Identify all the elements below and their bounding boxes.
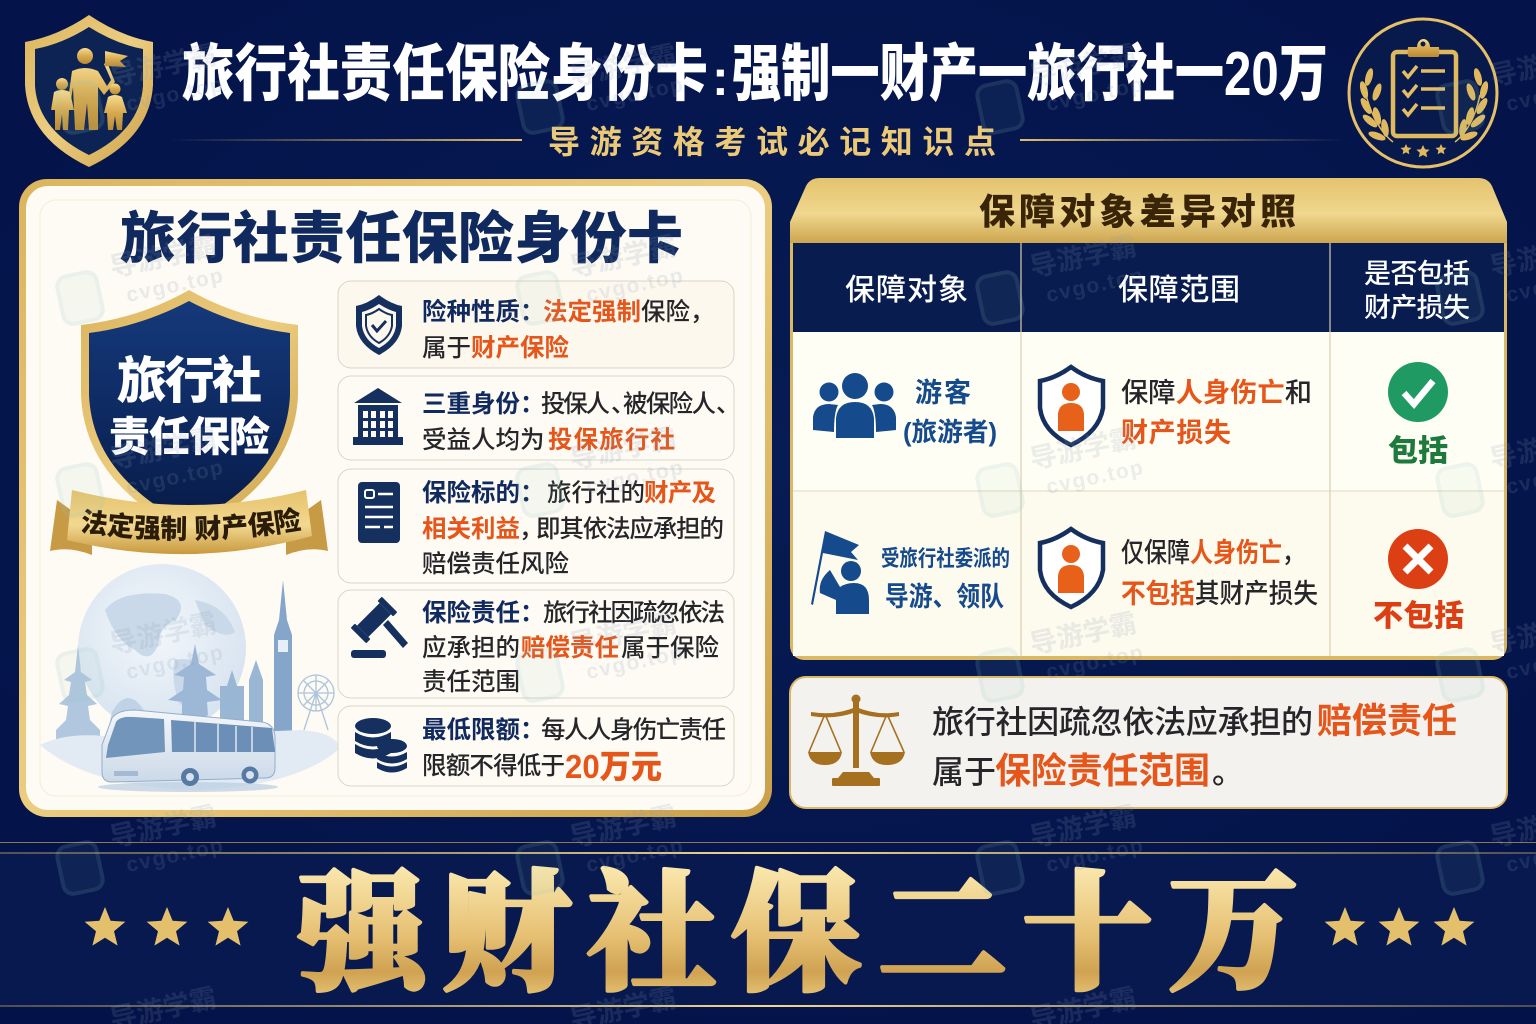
text: 保险责任： xyxy=(422,599,544,627)
stars right xyxy=(1325,907,1474,946)
icon: coins xyxy=(355,718,407,772)
icon: scales xyxy=(808,694,905,786)
icon: group of people xyxy=(813,373,896,438)
watermarks: cvgo.top xyxy=(584,834,686,877)
watermarks: cvgo.top xyxy=(124,264,226,307)
icon: gavel xyxy=(351,597,408,658)
watermarks: cvgo.top xyxy=(1044,641,1146,684)
table title bar xyxy=(790,178,1507,243)
watermarks: cvgo.top xyxy=(584,264,686,307)
row 4: liability xyxy=(338,590,734,698)
row: tourists: 财产损失 xyxy=(1121,418,1231,448)
row 4: liability: 责任范围 xyxy=(422,668,520,696)
row: guides: 导游、领队 xyxy=(885,582,1004,612)
label: 游客 xyxy=(915,378,971,408)
watermarks: cvgo.top xyxy=(124,456,226,499)
row 3: subject: 即其依法应承担的 xyxy=(536,515,724,543)
title xyxy=(182,40,1328,109)
emblem shield xyxy=(81,290,298,535)
icon: document xyxy=(358,482,400,543)
column heads xyxy=(793,243,1504,332)
watermarks: cvgo.top xyxy=(124,73,226,116)
row 1: nature xyxy=(338,281,734,368)
center pagoda xyxy=(168,644,222,735)
text: 险种性质： xyxy=(422,298,544,326)
watermarks: cvgo.top xyxy=(584,73,686,116)
ribbon: 法定强制 财产保险 xyxy=(82,507,302,542)
mnemonic band xyxy=(0,842,1536,1008)
row 5: minimum: 限额不得低于 xyxy=(422,752,565,780)
watermarks: 导游学霸 xyxy=(567,801,679,853)
watermarks: cvgo.top xyxy=(1044,73,1146,116)
watermarks: 导游学霸 xyxy=(107,231,219,283)
icon: shield check xyxy=(356,295,402,355)
row 4: liability: 属于保险 xyxy=(621,634,719,662)
column heads: 保障对象 xyxy=(845,274,968,307)
text: 旅行社因疏忽依法 xyxy=(543,599,725,627)
watermarks: cvgo.top xyxy=(584,641,686,684)
column heads: 财产损失 xyxy=(1364,293,1470,323)
watermarks: 导游学霸 xyxy=(567,423,679,475)
text: 每人人身伤亡责任 xyxy=(541,716,726,744)
bus xyxy=(98,710,278,792)
text: 保险， xyxy=(641,298,714,326)
column heads: 保障范围 xyxy=(1118,274,1240,307)
callout text: 赔偿责任 xyxy=(1317,702,1457,741)
text: 财产及 xyxy=(644,479,716,507)
watermarks: 导游学霸 xyxy=(107,40,219,92)
watermarks: 导游学霸 xyxy=(1027,231,1139,283)
watermarks: 导游学霸 xyxy=(1027,423,1139,475)
row: tourists: (旅游者) xyxy=(903,417,997,447)
icon: person shield xyxy=(1040,367,1103,445)
row 3: subject xyxy=(338,469,734,583)
text: 旅行社的 xyxy=(547,479,645,507)
row: tourists xyxy=(813,362,1448,468)
icon: clipboard medal xyxy=(1349,19,1497,167)
row 4: liability: 应承担的 xyxy=(422,634,520,662)
left pagoda xyxy=(56,645,100,745)
callout: key point xyxy=(790,677,1507,808)
callout text: 旅行社因疏忽依法应承担的 xyxy=(932,704,1313,740)
text: 保障人身伤亡和 xyxy=(1121,378,1312,408)
watermarks: cvgo.top xyxy=(584,456,686,499)
header xyxy=(25,15,1497,167)
callout: key point: 。 xyxy=(1212,754,1244,790)
row 2: identity: 受益人均为 xyxy=(422,426,544,454)
icon: check xyxy=(1388,362,1448,422)
watermarks: cvgo.top xyxy=(124,834,226,877)
icon: cross xyxy=(1388,529,1448,589)
text: 法定强制 xyxy=(543,298,641,326)
row: guides: 不包括其财产损失 xyxy=(1121,579,1318,609)
emblem shield: 责任保险 xyxy=(109,414,270,460)
watermarks: 导游学霸 xyxy=(107,608,219,660)
illustration: globe skyline and bus xyxy=(40,564,340,792)
icon: building xyxy=(353,388,403,445)
table title bar: 保障对象差异对照 xyxy=(979,191,1296,232)
ground haze xyxy=(40,730,340,790)
text: 保险标的： xyxy=(422,479,544,507)
label: included: 包括 xyxy=(1388,435,1448,468)
row 2: identity xyxy=(338,376,740,460)
watermarks: 导游学霸 xyxy=(1027,801,1139,853)
slogan: 强财社保二十万 xyxy=(296,864,1298,1008)
emblem text: 旅行社 xyxy=(117,353,262,409)
watermarks: 导游学霸 xyxy=(107,801,219,853)
watermarks: 导游学霸 xyxy=(567,40,679,92)
watermarks: cvgo.top xyxy=(1044,834,1146,877)
row 3: subject: 赔偿责任风险 xyxy=(422,550,569,578)
icon: guide with flag xyxy=(811,531,869,614)
ferris wheel xyxy=(298,675,334,730)
watermarks: 导游学霸 xyxy=(107,423,219,475)
label: excluded: 不包括 xyxy=(1373,600,1464,633)
title: 强制一财产一旅行社一20万 xyxy=(732,40,1328,109)
callout: key point: 保险责任范围 xyxy=(995,750,1210,791)
row 1: nature: 财产保险 xyxy=(471,334,569,362)
table body rows xyxy=(793,332,1504,491)
watermarks: cvgo.top xyxy=(1044,456,1146,499)
row 5: minimum xyxy=(338,706,734,786)
row 5: minimum: 20万元 xyxy=(565,748,662,785)
icon: person shield xyxy=(1040,529,1103,607)
card frame xyxy=(19,179,772,817)
text: 、 xyxy=(716,391,740,418)
table frame xyxy=(790,215,1507,660)
text: 被保险人 xyxy=(623,390,716,418)
subtitle rule left xyxy=(170,139,522,141)
panel: comparison table xyxy=(790,178,1507,660)
label: 受旅行社委派的 xyxy=(881,546,1010,571)
row 1: nature: 属于 xyxy=(422,335,471,362)
card heading: 旅行社责任保险身份卡 xyxy=(120,207,683,270)
watermarks: 导游学霸 xyxy=(1027,608,1139,660)
watermarks: 导游学霸 xyxy=(1027,40,1139,92)
text: 三重身份： xyxy=(422,390,544,418)
row 3: subject: 相关利益 xyxy=(422,515,520,543)
text: 仅保障人身伤亡， xyxy=(1121,538,1305,568)
ribbon xyxy=(50,490,328,555)
title: : xyxy=(712,50,729,106)
callout: key point: 属于 xyxy=(932,754,996,790)
row: guides xyxy=(811,529,1464,633)
icon: guide family shield xyxy=(25,15,153,167)
watermarks: cvgo.top xyxy=(124,641,226,684)
text: 投保人 xyxy=(541,390,610,418)
watermarks: cvgo.top xyxy=(1044,264,1146,307)
subtitle rule right xyxy=(1020,139,1345,141)
column heads: 是否包括 xyxy=(1364,259,1470,289)
stars left xyxy=(85,907,248,946)
row 2: identity: 投保旅行社 xyxy=(548,426,675,454)
title: 旅行社责任保险身份卡 xyxy=(182,40,708,109)
watermarks: 导游学霸 xyxy=(567,608,679,660)
towers xyxy=(220,660,263,731)
watermarks: 导游学霸 xyxy=(567,231,679,283)
row 4: liability: 赔偿责任 xyxy=(521,634,619,662)
subtitle: 导游资格考试必记知识点 xyxy=(548,124,996,160)
text: 、 xyxy=(611,391,636,418)
panel: identity card xyxy=(19,179,772,817)
text: 最低限额： xyxy=(422,716,544,744)
row 3: subject: ， xyxy=(519,516,544,543)
